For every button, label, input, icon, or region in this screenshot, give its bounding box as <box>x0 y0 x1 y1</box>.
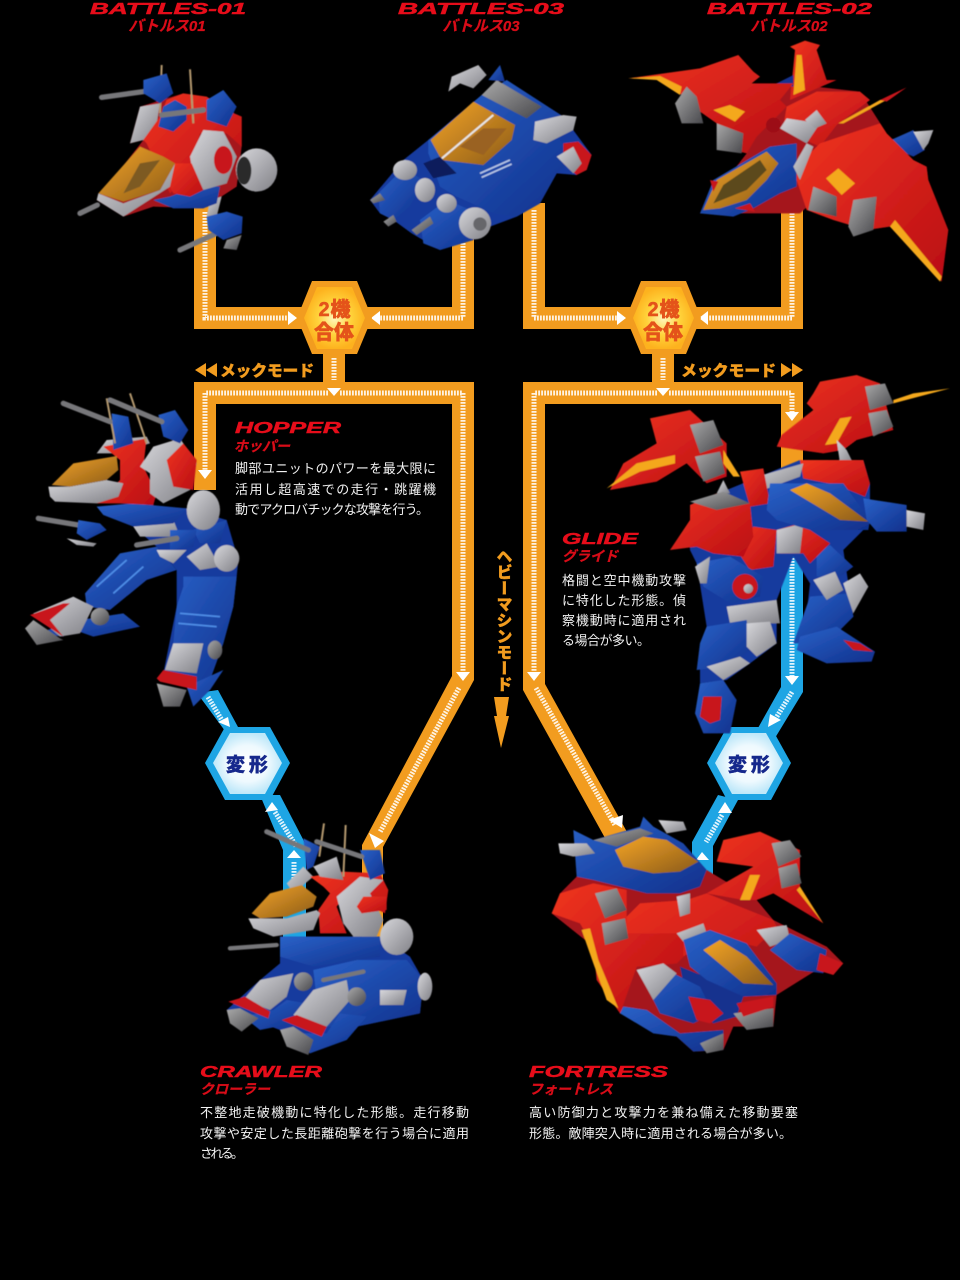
text block: Crawler <box>200 1064 469 1161</box>
text block: Glide <box>562 531 686 648</box>
text block: Hopper: 脚部ユニットのパワーを最大限に <box>235 461 436 476</box>
heading: BATTLES-01: BATTLES-01 <box>90 1 246 18</box>
text block: Fortress: 高い防御力と攻撃力を兼ね備えた移動要塞 <box>529 1105 798 1120</box>
hexagon: right 2機合体: 2機 <box>647 298 681 321</box>
text block: Crawler: される。 <box>200 1146 244 1161</box>
hexagon: right 変形: 変形 <box>728 753 774 776</box>
machine: Battles-03 <box>370 65 592 250</box>
text block: Glide: に特化した形態。偵 <box>562 593 686 608</box>
heading: BATTLES-02: バトルス02 <box>750 18 828 35</box>
text block: Glide: る場合が多い。 <box>562 633 650 648</box>
hexagon: left 2機合体 <box>297 281 372 354</box>
label: left mech mode: メックモード <box>220 362 314 380</box>
hexagon: left 2機合体: 合体 <box>314 321 354 344</box>
text block: Crawler: CRAWLER <box>200 1064 323 1081</box>
text block: Fortress: 形態。敵陣突入時に適用される場合が多い。 <box>529 1126 792 1141</box>
text block: Hopper <box>234 420 436 517</box>
machine: Battles-01 <box>80 65 277 250</box>
text block: Hopper: ホッパー <box>234 438 291 454</box>
text block: Fortress <box>529 1064 798 1141</box>
flow chart: left merge paths <box>194 205 474 960</box>
text block: Crawler: 不整地走破機動に特化した形態。走行移動 <box>200 1105 469 1120</box>
heading: BATTLES-01 <box>90 1 246 35</box>
text block: Hopper: 動でアクロバチックな攻撃を行う。 <box>235 502 429 517</box>
heading: BATTLES-02: BATTLES-02 <box>707 1 873 18</box>
heading: BATTLES-03 <box>398 1 565 35</box>
heading: BATTLES-02 <box>707 1 873 35</box>
label: heavy machine mode with arrow <box>494 548 512 748</box>
text block: Crawler: 攻撃や安定した長距離砲撃を行う場合に適用 <box>200 1126 469 1141</box>
hexagon: left 変形 <box>205 727 290 800</box>
hexagon: right 2機合体: 合体 <box>643 321 683 344</box>
label: right mech mode: メックモード <box>681 362 776 380</box>
machine: Crawler form <box>227 823 432 1055</box>
label: heavy machine mode with arrow: ヘビーマシンモード <box>494 548 512 692</box>
text block: Crawler: クローラー <box>200 1081 271 1097</box>
text block: Glide: グライド <box>562 548 619 564</box>
text block: Hopper: 活用し超高速での走行・跳躍機 <box>235 482 436 497</box>
flow chart: right transform paths <box>692 555 803 890</box>
heading: BATTLES-03: バトルス03 <box>442 18 520 35</box>
text block: Glide: GLIDE <box>562 531 640 548</box>
machine: Battles-02 <box>628 41 948 282</box>
flow chart: left transform paths <box>197 690 306 958</box>
machine: Glide mech <box>607 375 950 733</box>
heading: BATTLES-01: バトルス01 <box>128 18 206 35</box>
hexagon: right 変形 <box>707 727 791 800</box>
text block: Fortress: FORTRESS <box>529 1064 669 1081</box>
hexagon: left 2機合体: 2機 <box>318 298 352 321</box>
hexagon: left 変形: 変形 <box>226 753 272 776</box>
flow chart: right merge paths <box>523 190 803 838</box>
text block: Hopper: HOPPER <box>235 420 342 437</box>
text block: Glide: 格闘と空中機動攻撃 <box>562 573 686 588</box>
machine: Fortress form <box>552 817 843 1053</box>
machine: Hopper mech <box>25 393 239 707</box>
hexagon: right 2機合体 <box>626 281 701 354</box>
text block: Glide: 察機動時に適用され <box>562 613 686 628</box>
text block: Fortress: フォートレス <box>529 1081 614 1097</box>
heading: BATTLES-03: BATTLES-03 <box>398 1 565 18</box>
